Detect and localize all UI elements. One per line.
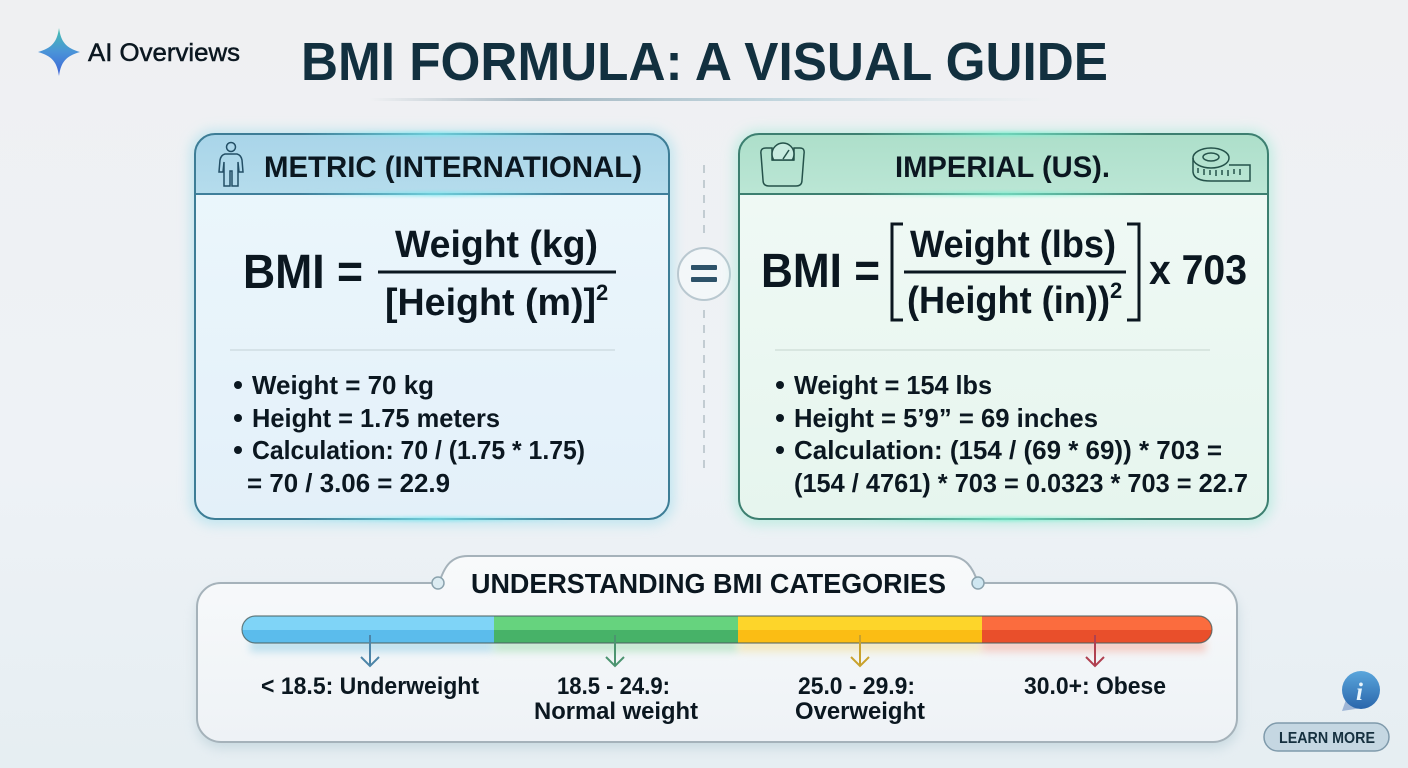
imperial formula: Weight (lbs) xyxy=(910,224,1116,266)
metric formula: 2 xyxy=(596,280,608,305)
label: normal weight xyxy=(534,673,698,725)
imperial formula: BMI = xyxy=(761,245,880,298)
metric heading: METRIC (INTERNATIONAL) xyxy=(264,151,642,184)
icon: person xyxy=(219,142,243,186)
imperial example xyxy=(776,370,1248,498)
metric example: Height = 1.75 meters xyxy=(252,403,500,433)
button: learn more xyxy=(1264,723,1389,751)
imperial example: Calculation: (154 / (69 * 69)) * 703 = xyxy=(794,435,1222,465)
icon: scale xyxy=(761,143,804,186)
metric formula: Weight (kg) xyxy=(395,224,598,266)
imperial example: Weight = 154 lbs xyxy=(794,370,992,400)
panel: BMI categories xyxy=(197,556,1238,748)
label: overweight xyxy=(795,673,925,725)
label: overweight: 25.0 - 29.9: xyxy=(798,673,915,700)
arrow: overweight xyxy=(851,635,869,666)
imperial example: Height = 5’9” = 69 inches xyxy=(794,403,1098,433)
label: normal weight: Normal weight xyxy=(534,698,698,725)
BMI colour bar xyxy=(242,616,1212,652)
metric formula: BMI = xyxy=(243,246,363,299)
button: learn more: LEARN MORE xyxy=(1279,730,1375,747)
arrow: normal weight xyxy=(606,635,624,666)
metric example: Calculation: 70 / (1.75 * 1.75) xyxy=(252,435,585,465)
label: obese: 30.0+: Obese xyxy=(1024,673,1166,700)
imperial example: (154 / 4761) * 703 = 0.0323 * 703 = 22.7 xyxy=(794,468,1248,498)
divider with equals badge xyxy=(678,165,730,472)
arrow: underweight xyxy=(361,635,379,666)
icon: four-point star xyxy=(38,28,80,76)
logo: AI Overviews xyxy=(38,28,240,76)
title: BMI FORMULA: A VISUAL GUIDE xyxy=(301,32,1108,92)
arrow: obese xyxy=(1086,635,1104,666)
categories heading: UNDERSTANDING BMI CATEGORIES xyxy=(471,568,946,599)
imperial formula: x 703 xyxy=(1149,246,1247,293)
imperial formula xyxy=(761,224,1247,322)
label: overweight: Overweight xyxy=(795,698,925,725)
label: normal weight: 18.5 - 24.9: xyxy=(557,673,670,700)
icon: info bubble xyxy=(1342,671,1380,711)
icon: info bubble: i xyxy=(1356,679,1363,706)
panel: metric xyxy=(190,130,674,525)
metric formula xyxy=(243,224,616,324)
metric example xyxy=(234,370,585,498)
metric example: = 70 / 3.06 = 22.9 xyxy=(247,468,450,498)
label: underweight: < 18.5: Underweight xyxy=(261,673,479,700)
icon: tape measure xyxy=(1193,148,1250,181)
imperial heading: IMPERIAL (US). xyxy=(895,151,1110,184)
logo text: AI Overviews xyxy=(88,39,240,67)
panel: imperial xyxy=(734,130,1273,525)
imperial formula: 2 xyxy=(1110,278,1122,303)
metric formula: [Height (m)] xyxy=(385,282,596,324)
imperial formula: (Height (in)) xyxy=(907,280,1110,322)
metric example: Weight = 70 kg xyxy=(252,370,434,400)
